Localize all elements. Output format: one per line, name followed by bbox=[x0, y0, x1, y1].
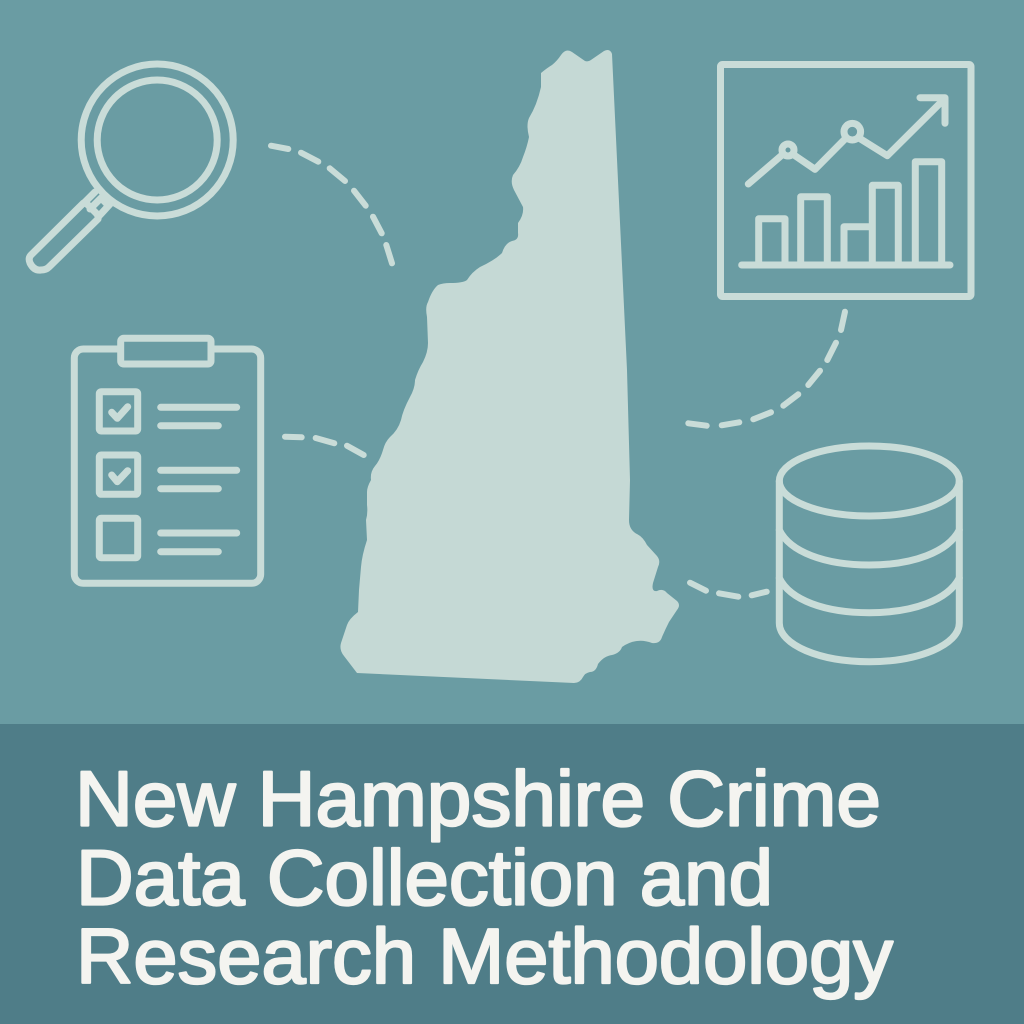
checkbox 2 bbox=[99, 455, 138, 494]
dashed connector: database to state bbox=[690, 583, 767, 597]
icon: magnifying glass bbox=[29, 64, 233, 270]
icon: clipboard checklist bbox=[74, 338, 261, 583]
background bbox=[0, 0, 1024, 724]
trend line bbox=[748, 100, 943, 184]
bars bbox=[759, 162, 942, 265]
title bbox=[75, 754, 893, 1000]
title: New Hampshire Crime bbox=[75, 754, 881, 842]
dashed connector: clipboard to state bbox=[285, 437, 364, 455]
New Hampshire state silhouette bbox=[340, 50, 679, 683]
icon: database cylinder bbox=[779, 446, 959, 662]
checkbox 3 bbox=[99, 518, 138, 558]
title: Research Methodology bbox=[76, 912, 893, 1000]
checkbox 1 bbox=[99, 392, 138, 431]
data points bbox=[782, 144, 794, 156]
baseline bbox=[742, 262, 950, 268]
title banner bbox=[0, 724, 1024, 1024]
checklist lines bbox=[161, 407, 237, 552]
dashed connector: chart to state bbox=[688, 312, 845, 426]
dashed connector: magnifier to state bbox=[271, 146, 392, 263]
arrow head bbox=[920, 98, 945, 123]
icon: framed chart with trend line and bars bbox=[720, 64, 971, 296]
title: Data Collection and bbox=[76, 834, 773, 922]
